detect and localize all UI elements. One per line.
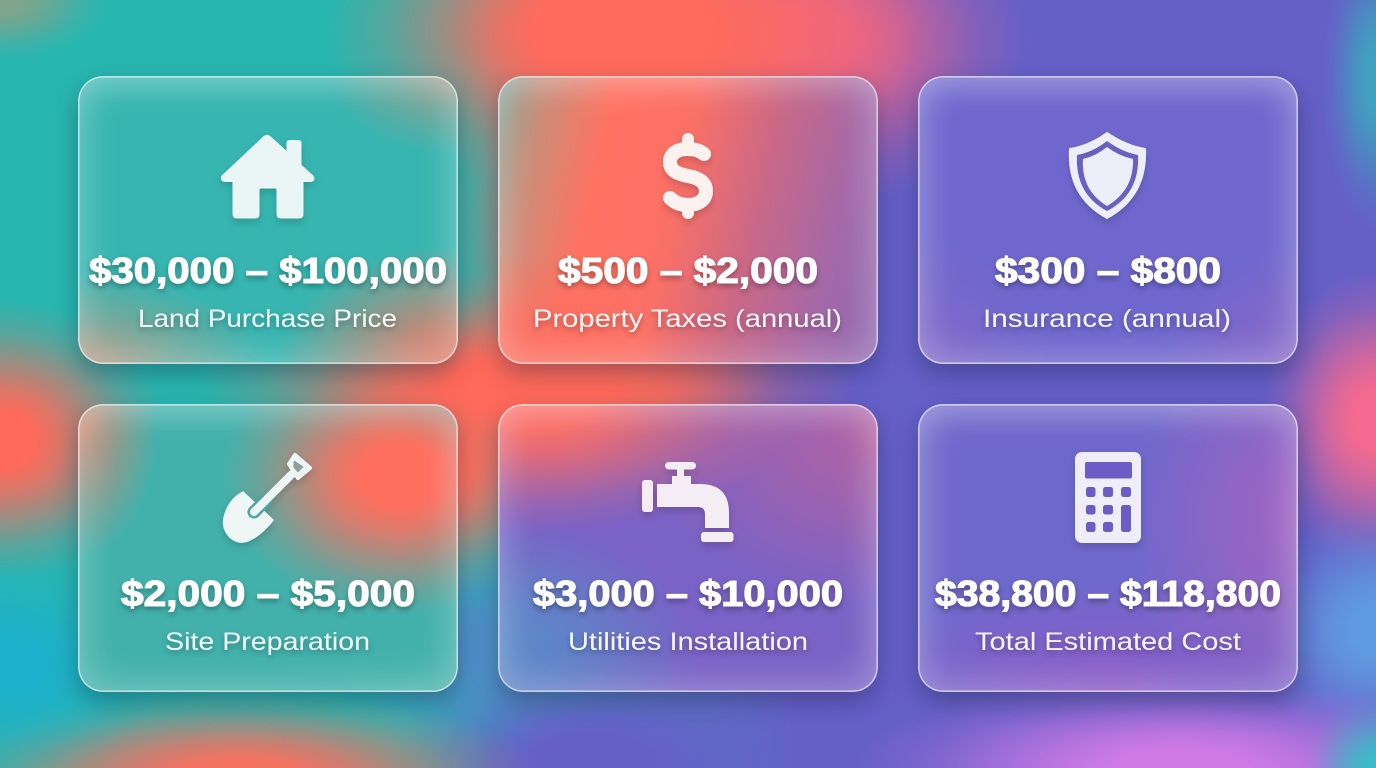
panel: land purchase price — [78, 76, 458, 364]
label: Property Taxes (annual) — [533, 305, 842, 333]
icon: dollar sign — [670, 139, 706, 213]
icon: water faucet — [642, 462, 734, 542]
label: Site Preparation — [165, 628, 370, 656]
value: $2,000 – $5,000 — [121, 573, 415, 614]
value: $38,800 – $118,800 — [935, 573, 1281, 614]
label: Utilities Installation — [568, 628, 808, 656]
panel: property taxes — [498, 76, 878, 364]
panel: insurance — [918, 76, 1298, 364]
value: $3,000 – $10,000 — [533, 573, 843, 614]
panel: utilities installation — [498, 404, 878, 692]
label: Land Purchase Price — [138, 305, 397, 333]
icon: calculator — [1075, 452, 1141, 543]
panel: total estimated cost — [918, 404, 1298, 692]
icon: house — [221, 135, 314, 218]
panel: site preparation — [78, 404, 458, 692]
value: $300 – $800 — [995, 250, 1221, 291]
label: Insurance (annual) — [983, 305, 1231, 333]
icon: shield — [1070, 133, 1145, 218]
icon: shovel — [224, 455, 310, 542]
value: $500 – $2,000 — [558, 250, 818, 291]
label: Total Estimated Cost — [975, 628, 1241, 656]
value: $30,000 – $100,000 — [89, 250, 447, 291]
